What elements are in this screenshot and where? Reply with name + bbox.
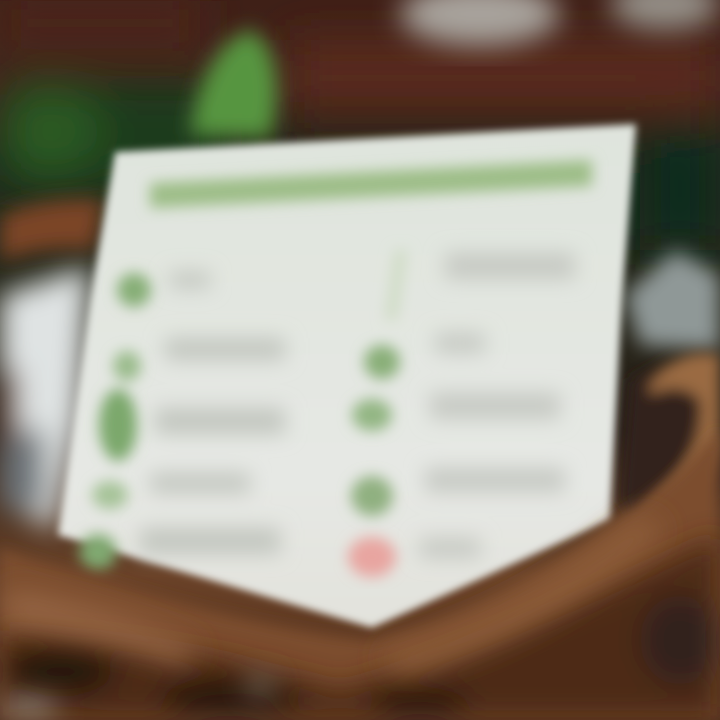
right grey cloth [625,250,720,350]
heading: blurred green title [150,160,592,208]
left column checkmarks [79,273,151,570]
basket rim, right side [610,353,720,555]
basket rim, upper left [0,199,105,262]
paper checklist [58,124,636,628]
left white cloth [0,265,90,530]
green leaf [190,30,277,138]
background: blurred shelf [0,0,720,250]
left column text lines [140,272,285,554]
right column checkmarks [351,250,407,516]
basket front [0,430,720,720]
wicker highlights [0,515,665,717]
right column text lines [420,253,575,558]
wicker shading [0,535,720,720]
white cups on the shelf [400,0,720,46]
red cross mark [348,537,396,577]
paper sheet [58,124,636,628]
